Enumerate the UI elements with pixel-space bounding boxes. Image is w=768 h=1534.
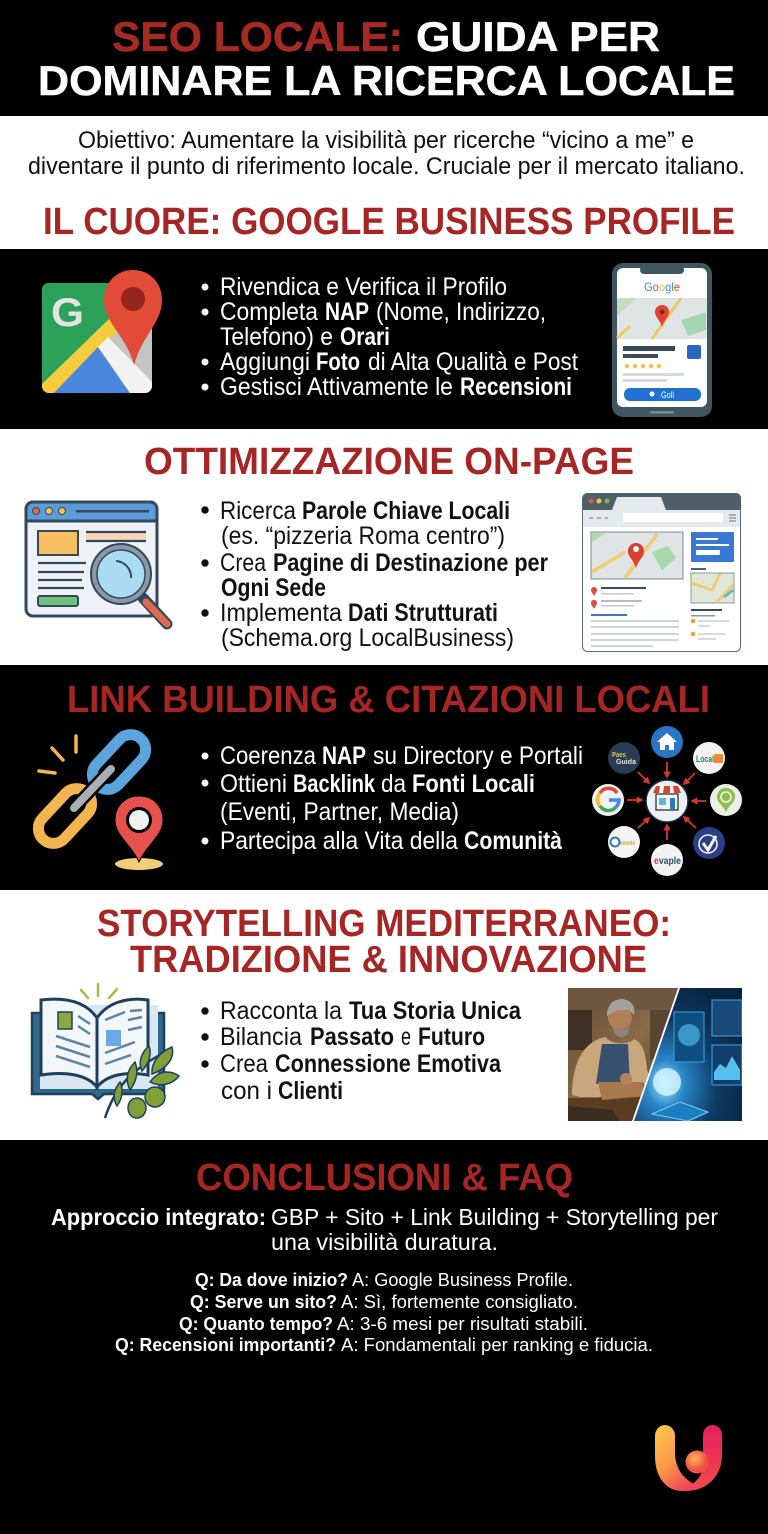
bullet list: NAP (322, 742, 366, 770)
bullet list: Dati Strutturati (348, 599, 498, 627)
diagram: citations network: Guida (616, 759, 636, 766)
bullet list: Passato (310, 1023, 394, 1051)
panel: storytelling (32, 984, 742, 1121)
FAQ list: A: Google Business Profile. (352, 1270, 573, 1290)
bullet list: Crea (220, 1050, 268, 1078)
title: SEO LOCALE: (112, 13, 403, 60)
bullet list: Bilancia (220, 1023, 302, 1051)
bullet list: (Nome, Indirizzo, (376, 298, 546, 326)
FAQ list: Q: Serve un sito? (190, 1292, 337, 1312)
conclusion statement (51, 1204, 718, 1255)
icon: browser with local page (582, 493, 741, 652)
icon: phone with Google listing: Google (644, 280, 680, 294)
bullet list: su Directory e Portali (373, 742, 583, 770)
icon: maps (42, 270, 162, 393)
bullet list: con i (221, 1077, 272, 1105)
FAQ list: A: Sì, fortemente consigliato. (341, 1292, 578, 1312)
bullet list: da (381, 770, 406, 798)
image: artisan and digital screens (568, 988, 742, 1121)
bullet list: e (401, 1023, 411, 1051)
title (38, 13, 735, 104)
bullet list: (es. “pizzeria Roma centro”) (221, 522, 505, 550)
conclusion statement: GBP + Sito + Link Building + Storytelling per (271, 1204, 718, 1230)
diagram: citations network: evaple (654, 856, 681, 867)
heading: link building: LINK BUILDING & CITAZIONI LOCALI (67, 679, 710, 721)
bullet list: Recensioni (460, 373, 572, 401)
diagram: citations network (592, 726, 742, 876)
bullet list: Implementa (220, 599, 342, 627)
bullet list: Parole Chiave Locali (302, 497, 510, 525)
diagram: citations network: Local (696, 754, 714, 764)
bullet list: NAP (325, 298, 369, 326)
bullet list (201, 497, 548, 652)
FAQ list (115, 1270, 653, 1355)
bullet list: (Eventi, Partner, Media) (220, 798, 459, 826)
icon: open book with olive branch (32, 984, 179, 1118)
diagram: citations network: Paes (612, 752, 626, 759)
bullet list: Coerenza (220, 742, 316, 770)
bullet list: Crea (220, 549, 266, 577)
title: DOMINARE LA RICERCA LOCALE (38, 57, 735, 104)
panel: Google Business Profile (42, 263, 712, 417)
bullet list: Pagine di Destinazione per (273, 549, 548, 577)
icon: phone with Google listing (612, 263, 712, 417)
bullet list: Telefono) e (220, 323, 333, 351)
bullet list: Fonti Locali (412, 770, 535, 798)
bullet list: Clienti (278, 1077, 343, 1105)
bullet list: (Schema.org LocalBusiness) (221, 624, 514, 652)
intro text: diventare il punto di riferimento locale. Cruciale per il mercato italiano. (28, 153, 745, 180)
bullet list (201, 997, 522, 1105)
FAQ list: Q: Da dove inizio? (195, 1270, 348, 1290)
bullet list (202, 742, 583, 855)
conclusion statement: una visibilità duratura. (271, 1229, 498, 1255)
heading: storytelling (97, 903, 671, 981)
bullet list: Aggiungi (220, 348, 310, 376)
bullet list: Futuro (418, 1023, 485, 1051)
intro text (28, 127, 745, 180)
heading: storytelling: STORYTELLING MEDITERRANEO: (97, 903, 671, 945)
bullet list: Backlink (293, 770, 375, 798)
FAQ list: A: Fondamentali per ranking e fiducia. (341, 1335, 653, 1355)
title: GUIDA PER (416, 13, 660, 60)
logo (655, 1425, 722, 1491)
bullet list: Gestisci Attivamente le (220, 373, 453, 401)
bullet list: Rivendica e Verifica il Profilo (220, 273, 507, 301)
heading: on-page: OTTIMIZZAZIONE ON-PAGE (144, 441, 634, 483)
icon: maps: G (51, 291, 84, 335)
bullet list: Ogni Sede (221, 574, 326, 602)
icon: phone with Google listing: Goll (661, 390, 674, 400)
heading: conclusions: CONCLUSIONI & FAQ (196, 1157, 573, 1199)
bullet list (202, 273, 578, 401)
bullet list: Ricerca (220, 497, 296, 525)
bullet list: Partecipa alla Vita della (220, 827, 458, 855)
bullet list: Connessione Emotiva (275, 1050, 502, 1078)
bullet list: Orari (340, 323, 390, 351)
bullet list: Tua Storia Unica (349, 997, 522, 1025)
diagram: citations network: events (620, 841, 636, 847)
icon: window with magnifier (26, 502, 167, 624)
bullet list: Comunità (464, 827, 562, 855)
bullet list: Racconta la (220, 997, 342, 1025)
bullet list: Ottieni (220, 770, 287, 798)
icon: phone with Google listing: ★★★★★ (623, 361, 663, 371)
FAQ list: Q: Recensioni importanti? (115, 1335, 336, 1355)
icon: chain link with pin (32, 728, 163, 870)
FAQ list: Q: Quanto tempo? (179, 1314, 333, 1334)
panel: link building (32, 726, 742, 876)
intro text: Obiettivo: Aumentare la visibilità per ricerche “vicino a me” e (78, 127, 694, 154)
conclusion statement: Approccio integrato: (51, 1204, 266, 1230)
bullet list: Foto (316, 348, 360, 376)
panel: on-page (26, 493, 741, 652)
heading: storytelling: TRADIZIONE & INNOVAZIONE (130, 939, 647, 981)
bullet list: Completa (220, 298, 318, 326)
bullet list: di Alta Qualità e Post (368, 348, 578, 376)
FAQ list: A: 3-6 mesi per risultati stabili. (337, 1314, 588, 1334)
